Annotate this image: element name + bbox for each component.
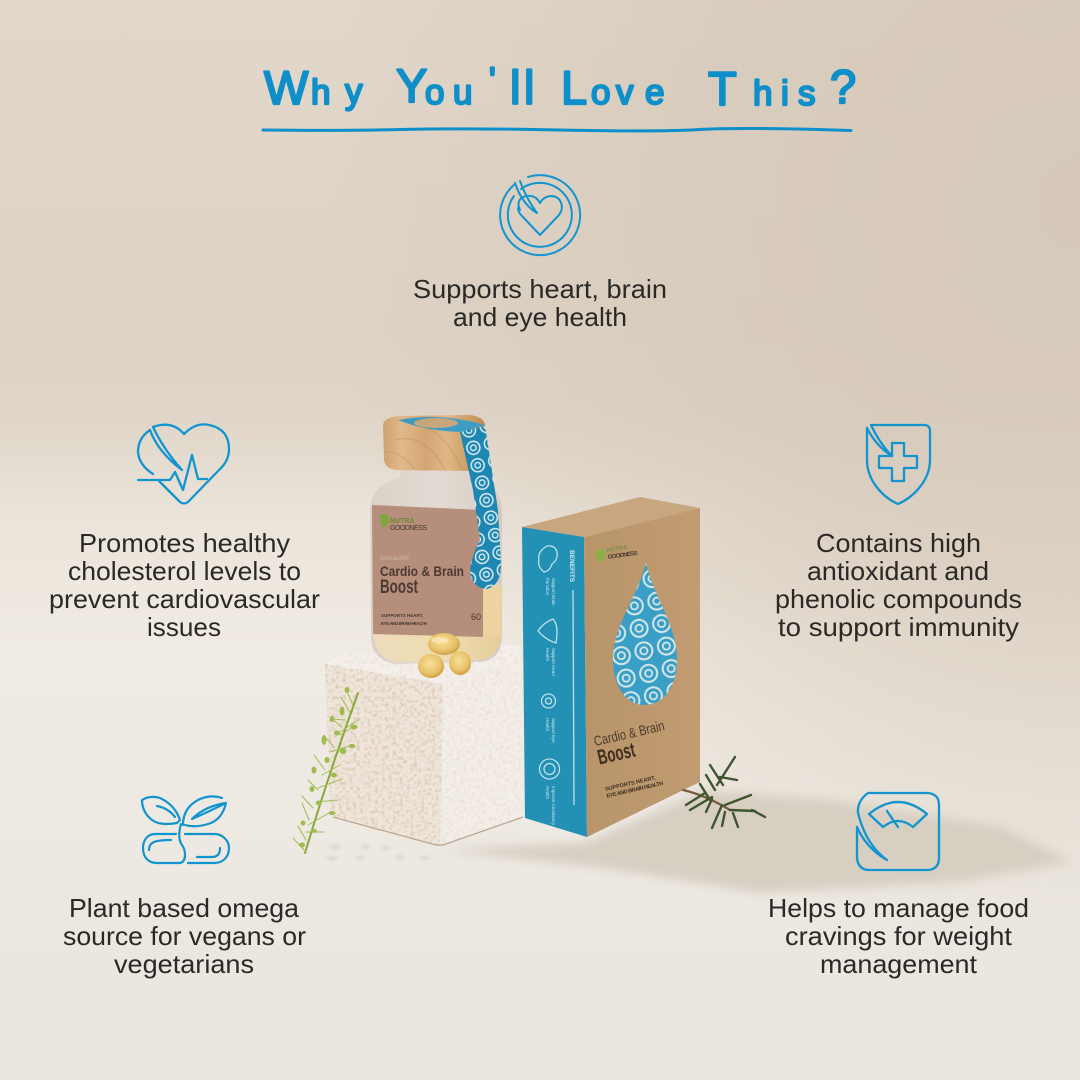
icon: weight scale [857,793,939,870]
product bottle: GOODNESS [390,525,427,532]
blue seal strip [460,426,501,589]
box side benefits: Support Brain [551,578,556,606]
box title: Boost [595,739,638,769]
box side benefits: Function [545,578,550,596]
text: antioxidant: phenolic compounds [775,584,1022,614]
text: weight management: management [820,949,978,979]
title: W [264,61,309,114]
text: heart, brain and eye health: and eye health [453,302,627,332]
box side benefits: Support Eye [551,718,556,743]
icon: heart with pulse [138,424,229,504]
title: ? [830,60,856,113]
title [263,59,856,131]
icon: plant capsule [142,796,229,863]
text: antioxidant: to support immunity [778,612,1019,642]
title: s [798,74,816,113]
title: ' [489,61,496,100]
text: plant based: Plant based omega [69,893,300,923]
product bottle: Boost [380,577,418,598]
icon: heart in circles [500,175,580,255]
box title: EYE AND BRAIN HEALTH [606,781,664,800]
title: l [524,61,534,114]
product bottle [370,415,502,678]
product bottle: SUPPORTS HEART, [381,613,423,618]
box title: SUPPORTS HEART, [605,775,657,793]
title: e [645,73,664,112]
text: cholesterol: prevent cardiovascular [49,584,320,614]
text: weight management [768,893,1029,979]
product bottle: NUTRA [390,518,414,525]
product box: NUTRA [606,545,629,554]
product box [522,497,700,837]
product bottle: 60 [471,612,481,622]
text: antioxidant: antioxidant and [807,556,989,586]
box side benefits: Health [545,648,550,662]
plant sprig left [293,687,358,853]
title: v [616,73,634,112]
stone cube [325,644,523,845]
title: Y [396,59,427,112]
product bottle: Cardio & Brain [380,563,464,579]
box side benefits: Health [545,718,550,732]
text: cholesterol: issues [147,612,221,642]
product bottle: Sumac365 [380,556,409,562]
text: weight management: Helps to manage food [768,893,1029,923]
box side benefits: Support Heart [551,648,556,677]
text: plant based: source for vegans or [63,921,306,951]
wood lid [383,415,485,471]
title: o [591,73,610,112]
text: heart, brain and eye health: Supports heart, brain [413,274,667,304]
text: plant based [63,893,306,979]
title: T [708,62,737,115]
text: weight management: cravings for weight [785,921,1013,951]
box title [592,717,678,800]
title: h [311,73,330,112]
box side benefits [538,546,575,826]
title: i [781,74,789,113]
icon: shield with cross [867,425,930,504]
text: cholesterol: Promotes healthy [79,528,290,558]
softgel capsules [418,633,471,678]
drop window [613,563,677,705]
panel: product still life [293,415,765,853]
text: antioxidant [775,528,1022,642]
title: h [753,74,772,113]
title: L [561,61,587,114]
text: plant based: vegetarians [114,949,254,979]
box title: Cardio & Brain [592,717,666,749]
plant sprig right [683,757,765,828]
text: antioxidant: Contains high [816,528,981,558]
title: l [510,61,520,114]
text: cholesterol [49,528,320,642]
title: o [425,73,444,112]
box side benefits: BENEFITS [568,550,575,583]
title: u [453,73,472,112]
title: y [345,72,363,111]
product box: GOODNESS [607,551,638,561]
text: cholesterol: cholesterol levels to [68,556,301,586]
text: heart, brain and eye health [413,274,667,332]
box side benefits: Improve Circulatory [551,786,556,826]
box side benefits: Health [545,786,550,800]
product bottle: EYE AND BRAIN HEALTH [381,621,427,626]
